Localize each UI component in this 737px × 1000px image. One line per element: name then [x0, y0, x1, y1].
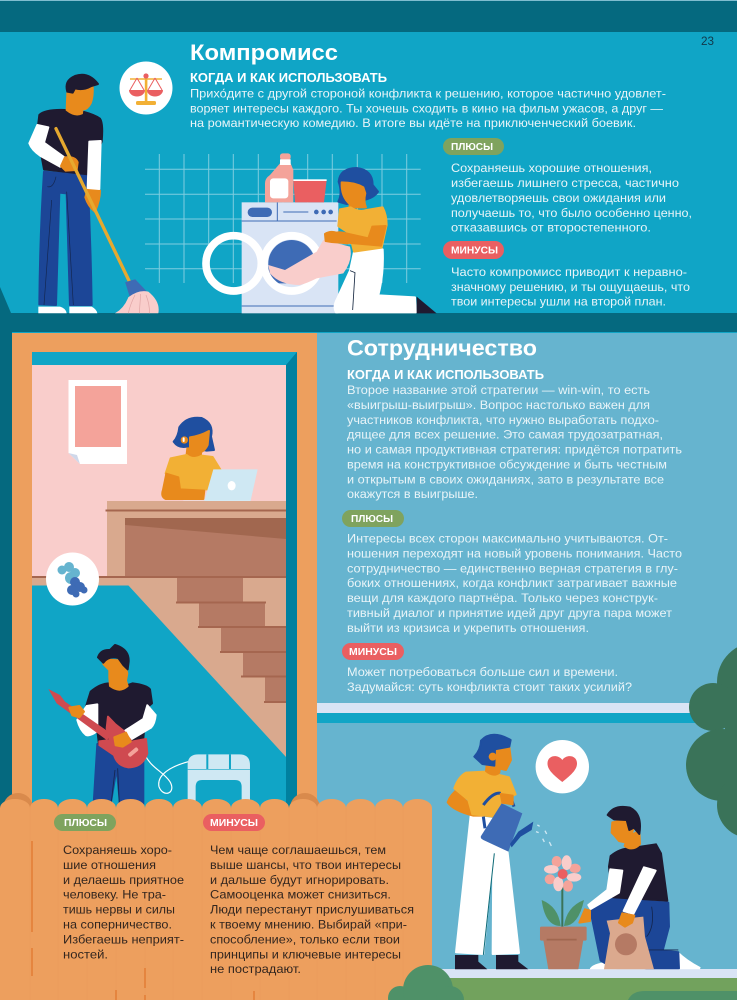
description	[190, 86, 666, 130]
shirt	[86, 683, 152, 746]
compromise cons text: значному решению, и ты ощущаешь, что	[451, 280, 690, 294]
icon: puzzle	[46, 552, 99, 606]
hair	[174, 418, 214, 451]
shirt	[454, 772, 516, 817]
fence cons text: и дальше будут игнорировать.	[210, 873, 389, 887]
fence posts behind	[3, 793, 33, 823]
fence pros text: шие отношения	[63, 858, 156, 872]
compromise pros badge	[443, 138, 504, 155]
collaboration pros text: выйти из кризиса и укрепить отношения.	[347, 621, 589, 635]
collaboration cons badge: МИНУСЫ	[349, 646, 397, 658]
face	[342, 182, 366, 207]
hand	[501, 794, 513, 804]
woman at laptop	[162, 418, 258, 503]
description: время на конструктивное обсуждение и быть честным	[347, 458, 667, 472]
neck	[486, 759, 501, 775]
bag	[604, 917, 654, 969]
description: «выигрыш-выигрыш». Вопрос настолько важен для	[347, 398, 650, 412]
collaboration pros text	[347, 532, 682, 635]
corner wedge	[0, 287, 11, 313]
fence pros text: Избегаешь неприят-	[63, 932, 184, 946]
collaboration pros text: вещи для каждого партнёра. Только через конструк-	[347, 591, 658, 605]
arm	[162, 474, 204, 499]
fence cons text: не пострадают.	[210, 962, 301, 976]
fence cons text: к твоему мнению. Выбирай «при-	[210, 918, 407, 932]
description: Прихо́дите с другой стороной конфликта к решению, которое частично удовлет-	[190, 86, 666, 100]
fence pros text: Сохраняешь хоро-	[63, 843, 172, 857]
neck and head	[67, 93, 83, 114]
fence cons text: выше шансы, что твои интересы	[210, 858, 401, 872]
icon: scales	[120, 62, 172, 114]
hands	[69, 706, 84, 717]
fence pros text: на соперничество.	[63, 918, 172, 932]
sleeve	[88, 141, 101, 189]
fence pros text: и делаешь приятное	[63, 873, 184, 887]
neck	[187, 448, 201, 457]
shoe	[417, 297, 437, 313]
woman watering	[448, 735, 551, 969]
fence pros text: тишь нервы и силы	[63, 903, 175, 917]
compromise pros text: получаешь то, что было особенно ценно,	[451, 206, 692, 220]
man gardening	[579, 807, 701, 969]
sleeves	[588, 869, 622, 909]
fence pros text: человеку. Не тра-	[63, 888, 166, 902]
subheading: КОГДА И КАК ИСПОЛЬЗОВАТЬ	[190, 71, 387, 85]
guitar	[48, 689, 113, 740]
fence pros badge: ПЛЮСЫ	[64, 817, 107, 829]
amp and cable	[145, 754, 250, 807]
neck and face	[625, 831, 640, 848]
fence	[0, 793, 432, 1000]
man with guitar	[48, 645, 156, 805]
shoes	[590, 962, 617, 969]
hair	[338, 168, 378, 204]
compromise pros text	[451, 161, 692, 234]
desk and stairs	[32, 501, 286, 757]
compromise pros text: отказавшись от второстепенного.	[451, 220, 651, 234]
left arm	[448, 788, 489, 816]
fence cons text: способление», только если твои	[210, 932, 400, 946]
jeans	[591, 898, 679, 968]
collaboration text block	[347, 336, 682, 501]
description	[347, 383, 682, 501]
fence cons text: Чем чаще соглашаешься, тем	[210, 843, 386, 857]
description: участников конфликта, что нужно выработать подхо-	[347, 413, 659, 427]
compromise pros badge: ПЛЮСЫ	[451, 141, 493, 153]
fence cons text: принципы и ключевые интересы	[210, 947, 401, 961]
fence cons badge: МИНУСЫ	[210, 817, 258, 829]
can handle	[483, 793, 514, 828]
compromise cons text: твои интересы ушли на второй план.	[451, 294, 666, 308]
shirt	[37, 110, 102, 174]
droplets	[536, 825, 551, 846]
fence cons text: Самооценка может снизиться.	[210, 888, 391, 902]
collaboration pros badge: ПЛЮСЫ	[351, 513, 393, 525]
compromise cons text	[451, 265, 690, 308]
page number: 23	[701, 36, 714, 48]
description: окажутся в выигрыше.	[347, 487, 478, 501]
bush	[388, 965, 464, 1000]
face	[492, 747, 511, 770]
fence pros badge	[54, 814, 116, 831]
collaboration pros text: тивный диалог и принятие идей друг друга пара может	[347, 606, 672, 620]
bucket	[293, 180, 327, 202]
compromise text block	[190, 40, 666, 130]
compromise pros text: избегаешь лишнего стресса, частично	[451, 176, 679, 190]
laptop	[204, 469, 258, 502]
subheading: КОГДА И КАК ИСПОЛЬЗОВАТЬ	[347, 368, 544, 382]
collaboration pros text: сотрудничество — единственно верная стратегия в глу-	[347, 561, 678, 575]
tree	[686, 642, 737, 838]
heading: collaboration: Сотрудничество	[347, 336, 537, 360]
hand	[61, 157, 78, 171]
frame: orange house wall	[12, 333, 317, 813]
shirt	[609, 844, 667, 901]
compromise pros text: удовлетворяешь свои ожидания или	[451, 191, 666, 205]
jeans	[39, 172, 92, 305]
heading: compromise: Компромисс	[190, 40, 338, 65]
door rings	[206, 236, 261, 291]
shirt	[166, 455, 221, 489]
can	[481, 803, 522, 852]
sleeves	[77, 704, 97, 735]
compromise cons text: Часто компромисс приводит к неравно-	[451, 265, 687, 279]
panel: collaboration background	[317, 333, 737, 973]
compromise cons badge: МИНУСЫ	[451, 244, 498, 256]
poster	[68, 380, 127, 464]
tile grid wall	[145, 154, 421, 283]
description: воряет интересы каждого. Ты хочешь сходить в кино на фильм ужасов, а друг —	[190, 101, 664, 115]
woman doing laundry	[268, 168, 437, 313]
description: но и самая продуктивная стратегия: придётся потратить	[347, 443, 682, 457]
fence pros text	[63, 843, 184, 961]
left forearm	[85, 189, 100, 212]
flower in pot	[540, 855, 587, 969]
fence cons text	[210, 843, 414, 976]
collaboration pros text: ношения переходят на новый уровень понимания. Часто	[347, 546, 682, 560]
collaboration pros badge	[342, 510, 404, 527]
collaboration cons text: Задумайся: суть конфликта стоит таких усилий?	[347, 680, 632, 694]
shoes	[455, 955, 528, 969]
mop	[126, 280, 146, 301]
mop handle	[56, 129, 129, 281]
man with mop	[29, 75, 159, 313]
fence cons text: Люди перестанут прислушиваться	[210, 903, 414, 917]
shirt	[338, 207, 387, 252]
collaboration cons text	[347, 665, 632, 694]
compromise pros text: Сохраняешь хорошие отношения,	[451, 161, 652, 175]
collaboration cons text: Может потребоваться больше сил и времени.	[347, 665, 618, 679]
band between sections	[0, 313, 737, 332]
description: на романтическую комедию. В итоге вы идёте на приключенческий боевик.	[190, 116, 636, 130]
shoes	[38, 307, 97, 313]
hand	[619, 913, 634, 927]
trousers	[456, 816, 519, 954]
jeans	[94, 744, 143, 804]
fence pros text: ностей.	[63, 947, 108, 961]
top band	[0, 0, 737, 32]
description: дящее для всех решение. Это самая трудозатратная,	[347, 428, 663, 442]
fence cons badge	[203, 814, 265, 831]
panel: compromise background	[0, 32, 737, 313]
hair	[608, 807, 640, 834]
collaboration pros text: Интересы всех сторон максимально учитываются. От-	[347, 532, 668, 546]
description: и открытым в своих ожиданиях, зато в результате все	[347, 472, 664, 486]
arm	[343, 226, 386, 246]
left edge column	[0, 332, 12, 812]
compromise cons badge	[443, 241, 504, 259]
collaboration pros text: боких отношениях, когда конфликт затрагивает важные	[347, 576, 677, 590]
hair	[474, 735, 511, 766]
trousers	[335, 249, 416, 312]
ground	[432, 969, 737, 1000]
hands	[325, 232, 349, 243]
washing machine	[206, 153, 338, 313]
panel dividers	[317, 703, 737, 723]
neck and head	[103, 659, 128, 690]
face	[190, 431, 209, 453]
bottle	[265, 163, 293, 202]
laundry	[268, 240, 351, 285]
collaboration cons badge	[342, 643, 404, 660]
far hand	[579, 909, 590, 923]
icon: heart	[536, 740, 589, 793]
description: Второе название этой стратегии — win-win, то есть	[347, 383, 650, 397]
